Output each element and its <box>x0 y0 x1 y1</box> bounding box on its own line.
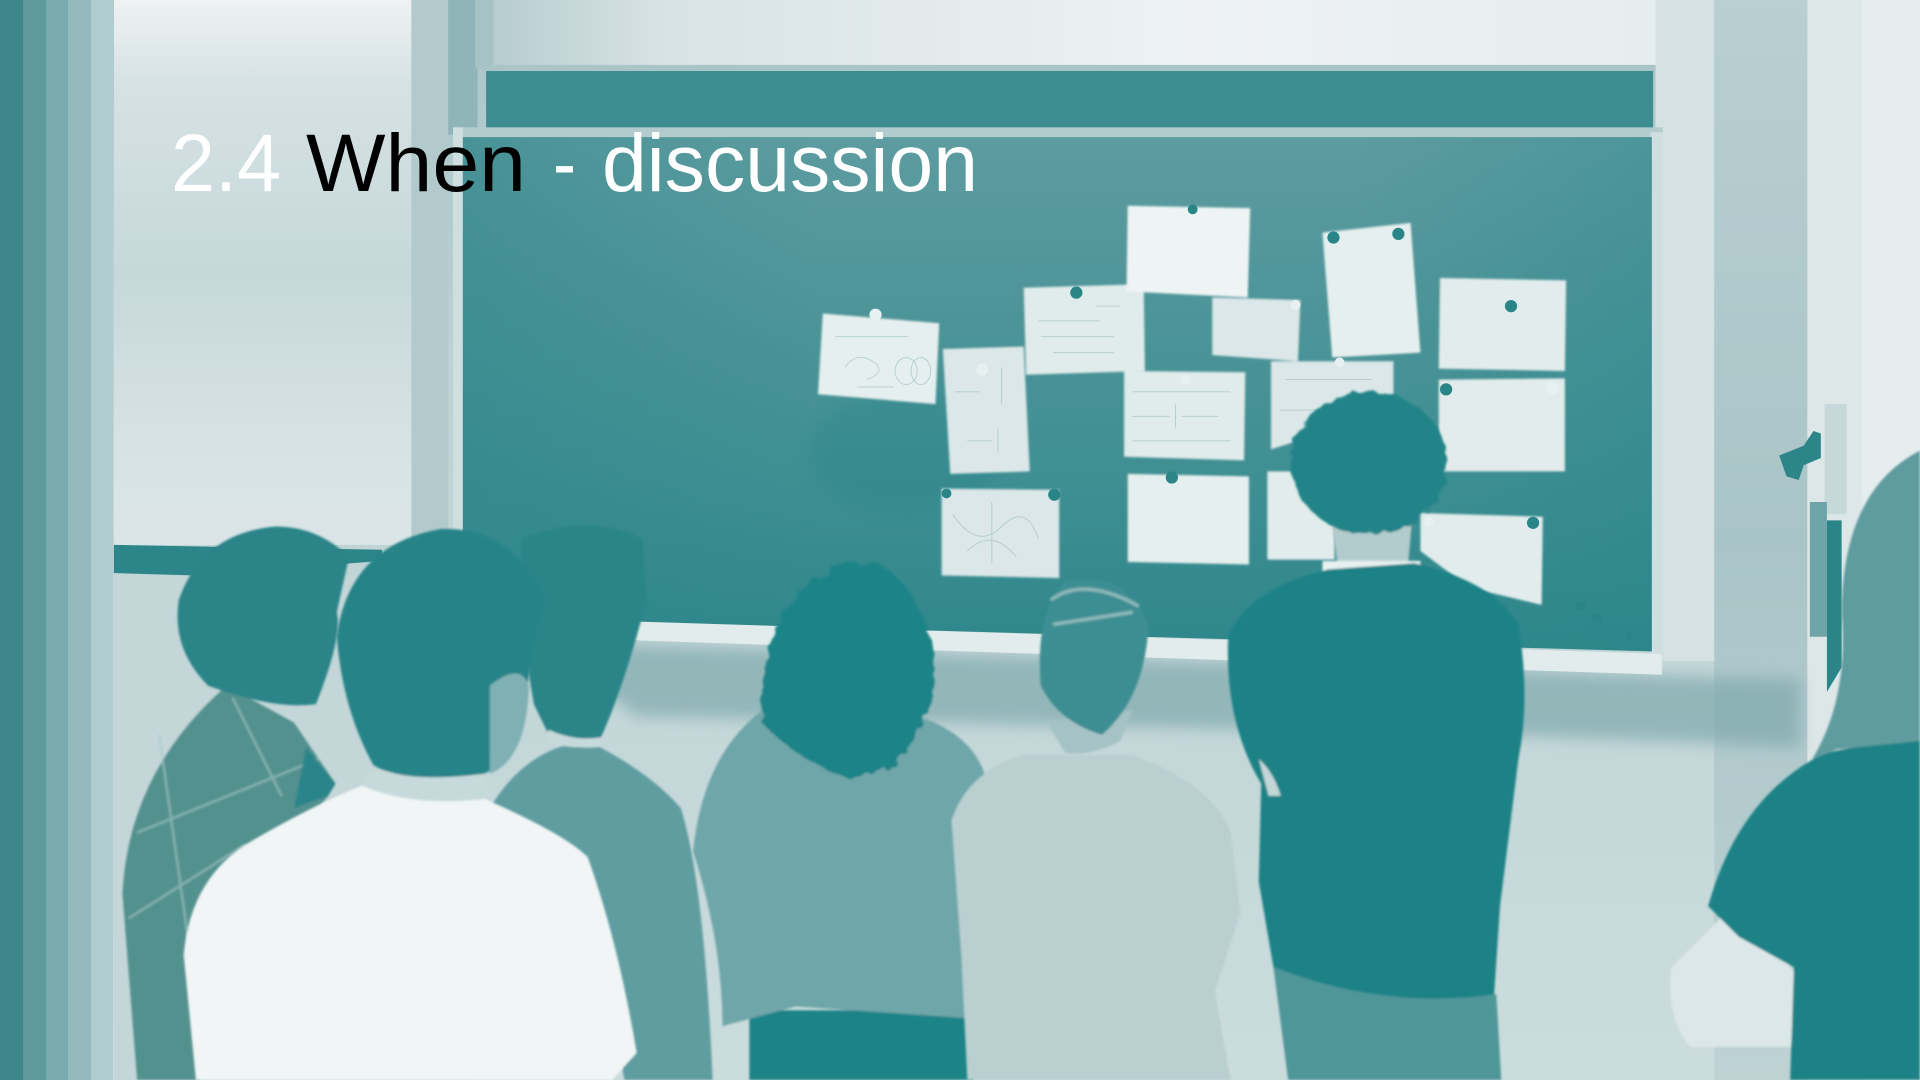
person: grey t-shirt <box>951 579 1240 1080</box>
sketch 9 <box>1124 371 1245 460</box>
sketch 10 <box>1271 361 1393 449</box>
person: black sweater with curly hair <box>1228 392 1524 1080</box>
main blackboard <box>453 127 1663 673</box>
person: plaid shirt at left <box>122 527 349 1080</box>
wall hook <box>1779 404 1847 692</box>
sketch 13 <box>1267 471 1335 560</box>
person: sweater, third from left <box>490 525 713 1080</box>
magnets <box>869 204 1633 640</box>
sketch 1 <box>818 313 939 404</box>
sketch 3 <box>1024 284 1145 375</box>
sketch 11 <box>942 489 1059 578</box>
sketch 14 <box>1420 513 1543 605</box>
title: - <box>553 118 576 209</box>
person: white t-shirt <box>184 529 637 1080</box>
pencil scribbles on sketches <box>835 306 1371 563</box>
sketch 7 <box>1439 278 1566 371</box>
person: far right with long hair <box>1670 451 1920 1080</box>
projector screen bottom bar <box>114 545 382 576</box>
title <box>171 118 978 209</box>
left vertical colour stripes <box>0 0 113 1080</box>
title: 2.4 <box>171 118 281 209</box>
person: knit sweater with dark curly hair <box>693 563 986 1080</box>
sketch 4 <box>1127 206 1250 298</box>
paper sketches on board <box>818 206 1566 605</box>
upper blackboard <box>484 65 1656 132</box>
sketch 8 <box>1439 378 1565 471</box>
sketch 6 <box>1322 223 1420 358</box>
chalk tray <box>576 620 1662 675</box>
sketch 12 <box>1128 474 1249 564</box>
sketch 5 <box>1212 298 1300 361</box>
title: When <box>306 118 526 209</box>
wall shadow beneath board <box>539 643 1800 747</box>
sketch 2 <box>943 347 1030 474</box>
title: discussion <box>602 118 978 209</box>
